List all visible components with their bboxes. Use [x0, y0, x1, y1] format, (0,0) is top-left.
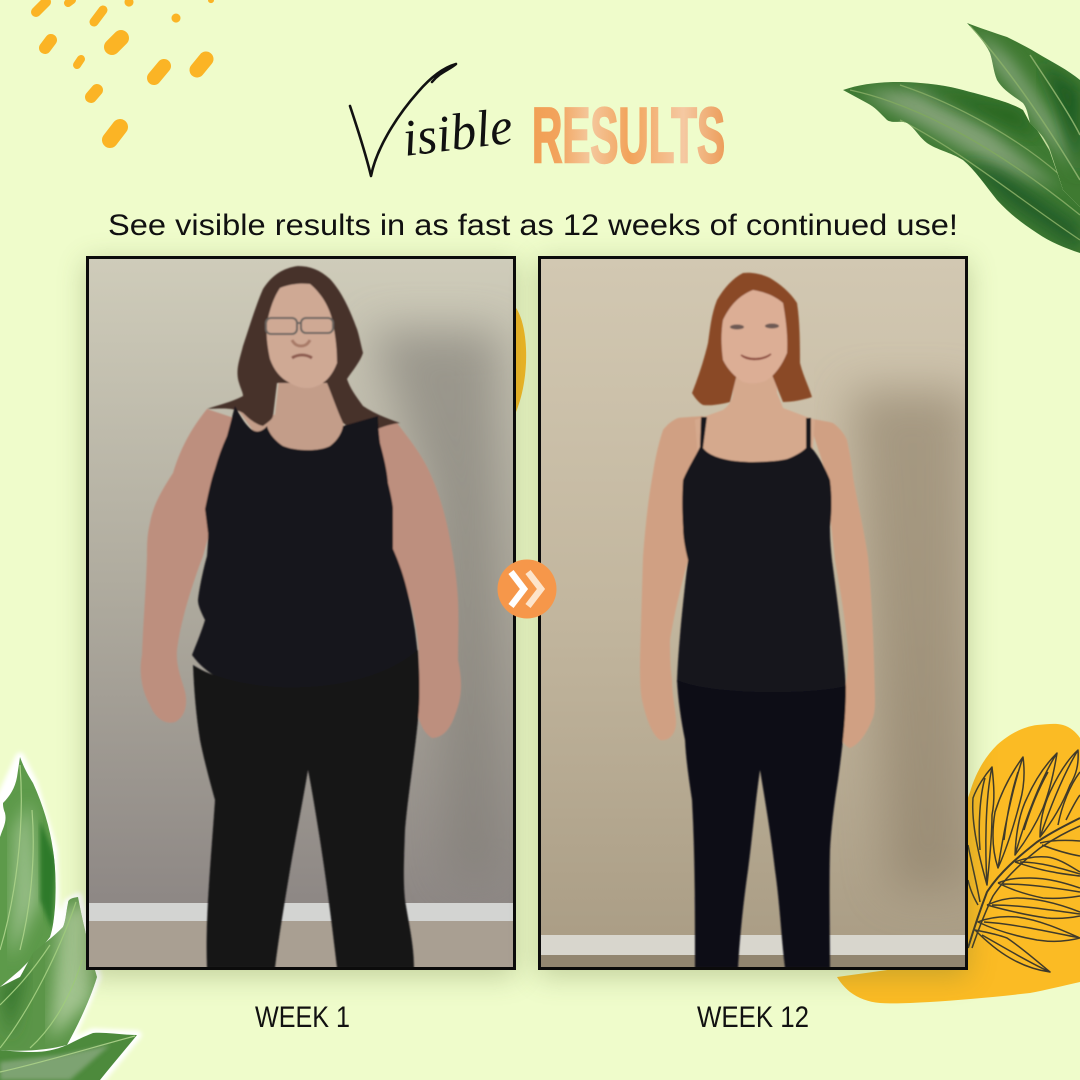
glasses [266, 318, 333, 334]
hair [207, 266, 400, 433]
front leaf [840, 78, 1080, 258]
leggings [677, 680, 846, 968]
label: week 12: WEEK 12 [697, 1001, 809, 1034]
panel: week 12 photo [538, 256, 968, 970]
wall shadow [850, 390, 970, 890]
leaf 1 [0, 757, 56, 987]
panel: week 1 photo [86, 256, 516, 970]
border: week 12 [538, 256, 968, 970]
back leaf [967, 23, 1080, 207]
face [267, 284, 337, 388]
icon: yellow blob behind left photo edge [516, 308, 526, 412]
leaf 3 [0, 1030, 140, 1080]
icon: bottom left leaves [0, 750, 140, 1080]
title [348, 62, 725, 179]
border: week 1 [86, 256, 516, 970]
baseboard and floor [86, 903, 516, 922]
icon: yellow dots [36, 0, 211, 140]
neck and chest [235, 370, 378, 455]
baseboard and floor [538, 935, 968, 956]
icon: yellow blob with palm leaf [837, 724, 1080, 1003]
leaf 2 [0, 890, 100, 1055]
label: week 1: WEEK 1 [255, 1001, 350, 1034]
figure: woman before [141, 266, 461, 968]
figure: woman after [640, 273, 875, 968]
neck and chest [695, 375, 815, 470]
script word: Visible [350, 64, 516, 176]
pants [193, 650, 420, 968]
wall shadow [370, 330, 500, 880]
arms and shoulders [640, 416, 703, 740]
hair [692, 273, 812, 405]
icon: top right leaves [840, 20, 1080, 258]
leaflet left [968, 845, 980, 905]
icon: orange arrow circle [498, 560, 556, 618]
eyes [730, 324, 779, 330]
nose and mouth [292, 340, 310, 346]
face [722, 290, 787, 383]
smile [741, 354, 771, 359]
arms and shoulders [141, 409, 240, 723]
script word: Visible: isible [400, 98, 516, 168]
leaflets up [973, 767, 994, 885]
leaflets right [1040, 840, 1080, 856]
white sticker outline [0, 757, 137, 1080]
subtitle: See visible results in as fast as 12 weeks of continued use! [108, 209, 958, 242]
tank top [192, 406, 418, 695]
stem [968, 818, 1080, 948]
tank top [677, 417, 846, 693]
